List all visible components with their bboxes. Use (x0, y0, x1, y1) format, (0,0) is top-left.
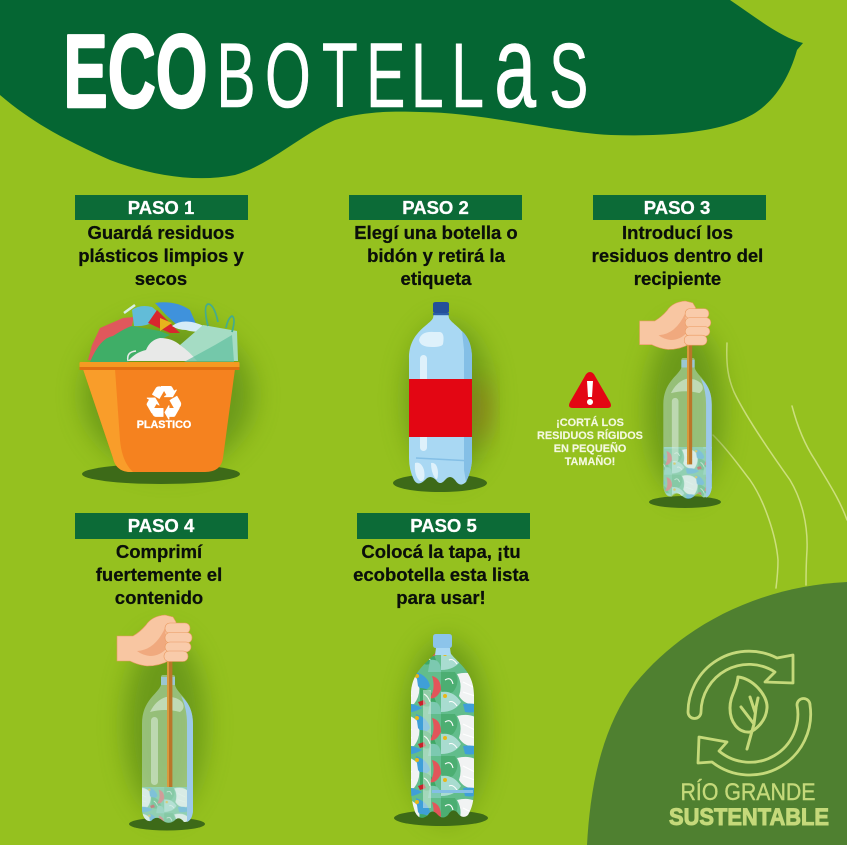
paso 5 text: ecobotella esta lista (353, 564, 530, 585)
warning text: TAMAÑO! (565, 455, 615, 468)
panel: paso 2 (349, 195, 522, 492)
logo text: SUSTENTABLE (669, 804, 829, 831)
icon: plastic bin: PLASTICO (137, 419, 191, 431)
title: ECO (63, 13, 208, 130)
paso 4 text: fuertemente el (96, 564, 222, 585)
paso 4 text: Comprimí (116, 541, 202, 562)
icon: warning triangle (569, 372, 611, 408)
decorative curves (713, 343, 847, 588)
paso 3 heading: PASO 3 (644, 197, 710, 218)
paso 2 heading: PASO 2 (402, 197, 469, 218)
paso 1 text: secos (135, 268, 187, 289)
callout: warning (537, 372, 643, 468)
paso 5 heading: PASO 5 (410, 515, 477, 536)
paso 2 heading (349, 195, 522, 220)
title: E (366, 25, 405, 127)
panel: logo (587, 582, 847, 845)
title: L (451, 25, 484, 127)
icon: leaf (730, 677, 767, 749)
panel: paso 4 (75, 513, 248, 830)
paso 3 heading (593, 195, 766, 220)
logo background (587, 582, 847, 845)
paso 2 text: etiqueta (401, 268, 472, 289)
paso 3 text: recipiente (634, 268, 721, 289)
paso 1 heading (75, 195, 248, 220)
header banner (0, 0, 803, 178)
icon: hand pressing waste into bottle (640, 301, 723, 508)
paso 4 heading: PASO 4 (128, 515, 195, 536)
panel: paso 5 (353, 513, 530, 826)
icon: full ecobottle (394, 634, 488, 826)
paso 1 text: Guardá residuos (87, 222, 235, 243)
paso 2 text: bidón y retirá la (367, 245, 506, 266)
title: a (494, 0, 537, 132)
paso 5 heading (357, 513, 530, 539)
title: L (411, 25, 444, 127)
paso 2 text: Elegí una botella o (354, 222, 518, 243)
paso 1 heading: PASO 1 (128, 197, 194, 218)
icon: hand compressing waste (117, 615, 205, 830)
paso 3 text: residuos dentro del (592, 245, 763, 266)
title: O (265, 25, 311, 127)
warning text: EN PEQUEÑO (554, 442, 627, 455)
title: S (549, 25, 588, 127)
paso 5 text: Colocá la tapa, ¡tu (361, 541, 521, 562)
warning text: ¡CORTÁ LOS (556, 417, 624, 429)
paso 4 heading (75, 513, 248, 539)
paso 5 text: para usar! (396, 587, 486, 608)
icon: recycling arrows (688, 651, 811, 775)
warning text: RESIDUOS RÍGIDOS (537, 429, 643, 442)
paso 1 text: plásticos limpios y (78, 245, 244, 266)
title: B (216, 25, 256, 127)
paso 4 text: contenido (115, 587, 203, 608)
panel: paso 1 (75, 195, 253, 484)
title: T (322, 25, 358, 127)
icon: bottle with label (393, 302, 490, 492)
paso 3 text: Introducí los (622, 222, 733, 243)
panel: paso 3 (537, 195, 766, 508)
icon: plastic bin: ♻ (143, 376, 185, 430)
logo text: RÍO GRANDE (680, 779, 816, 806)
icon: plastic bin (80, 302, 253, 484)
